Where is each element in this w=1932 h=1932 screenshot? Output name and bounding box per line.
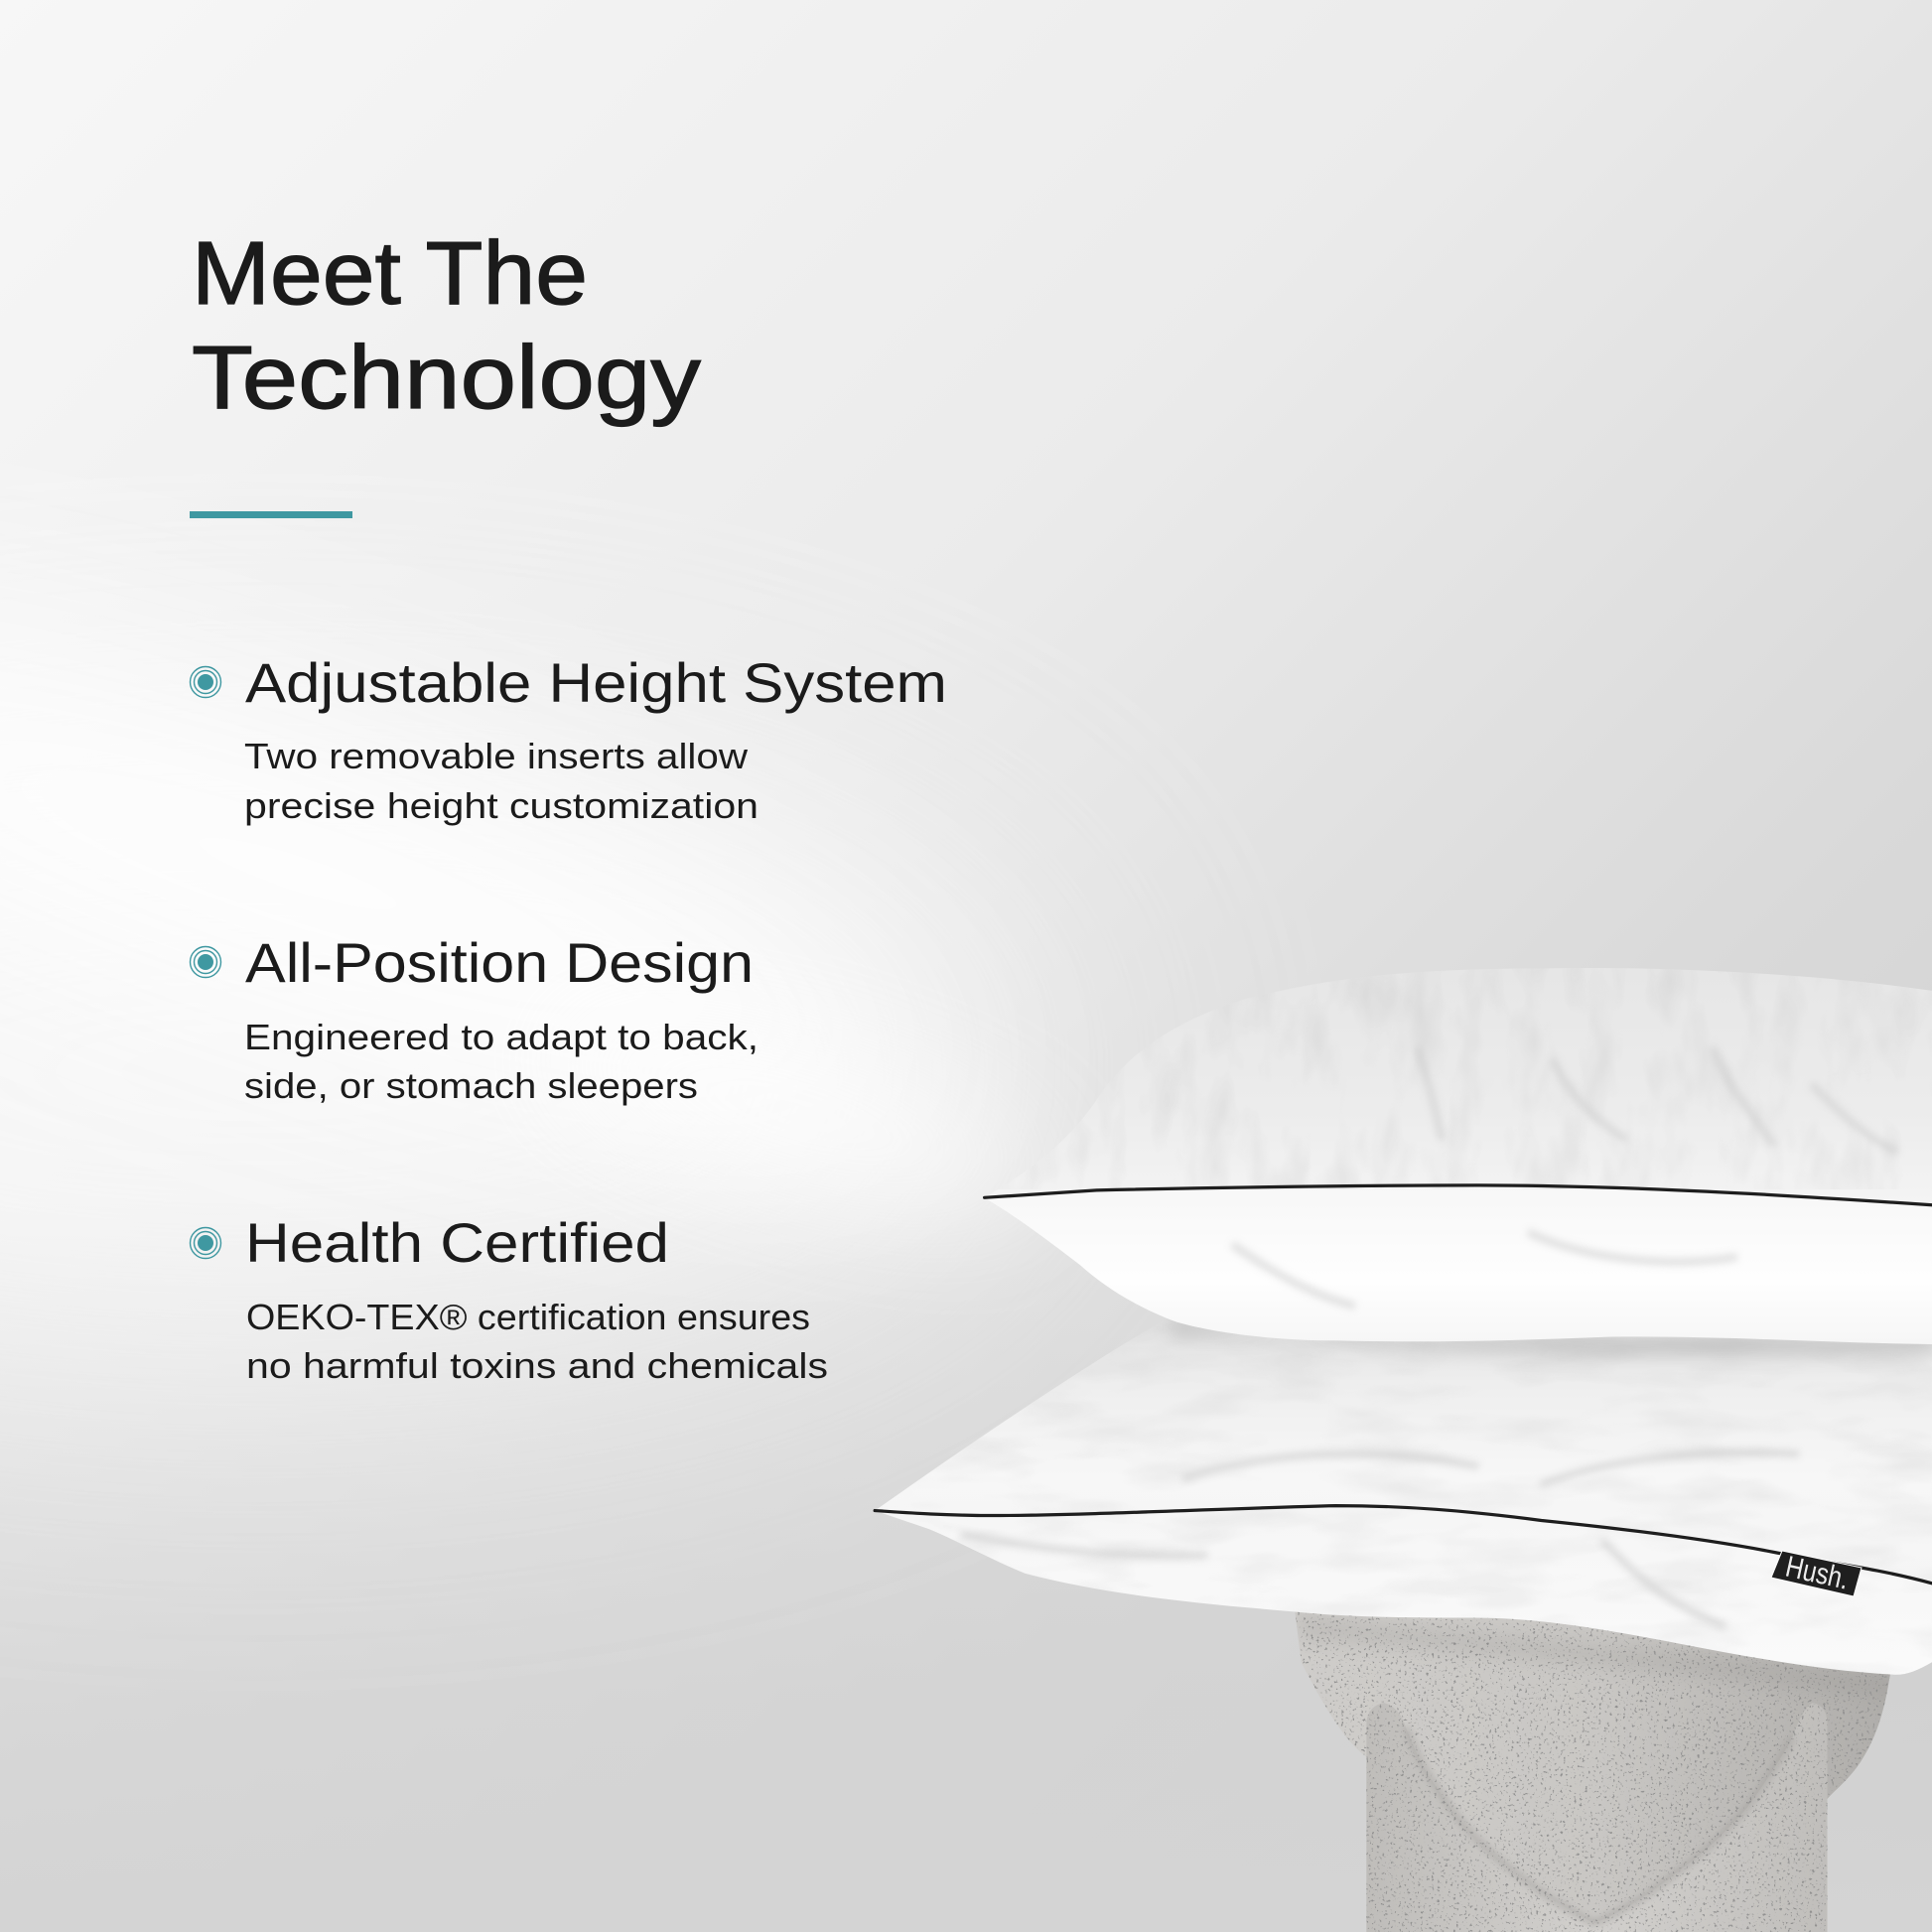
description: no harmful toxins and chemicals bbox=[246, 1345, 828, 1386]
title bbox=[192, 224, 701, 428]
title: Meet The bbox=[192, 224, 588, 324]
icon: target bullet bbox=[191, 667, 220, 697]
feature: all-position design bbox=[191, 931, 759, 1106]
upper pillow bbox=[973, 961, 1932, 1344]
icon: target bullet bbox=[191, 947, 220, 977]
description bbox=[244, 1017, 759, 1106]
product photo: pillows on stone stand bbox=[863, 961, 1932, 1932]
brand tag: Hush.: Hush. bbox=[1782, 1551, 1852, 1596]
description bbox=[246, 1297, 828, 1386]
title accent rule bbox=[190, 511, 352, 518]
description: Engineered to adapt to back, bbox=[244, 1017, 759, 1057]
lower pillow bbox=[863, 1307, 1932, 1688]
description: Two removable inserts allow bbox=[244, 736, 749, 776]
feature: health certified bbox=[191, 1211, 828, 1386]
heading: Adjustable Height System bbox=[245, 651, 947, 714]
icon: target bullet bbox=[191, 1227, 220, 1259]
heading: Health Certified bbox=[245, 1211, 669, 1274]
description: side, or stomach sleepers bbox=[244, 1065, 698, 1106]
description: OEKO-TEX® certification ensures bbox=[246, 1297, 810, 1337]
description: precise height customization bbox=[244, 785, 759, 826]
title: Technology bbox=[192, 329, 701, 428]
heading: All-Position Design bbox=[245, 931, 754, 994]
stone stand bbox=[1282, 1601, 1910, 1932]
feature: adjustable height system bbox=[191, 651, 947, 826]
description bbox=[244, 736, 759, 826]
